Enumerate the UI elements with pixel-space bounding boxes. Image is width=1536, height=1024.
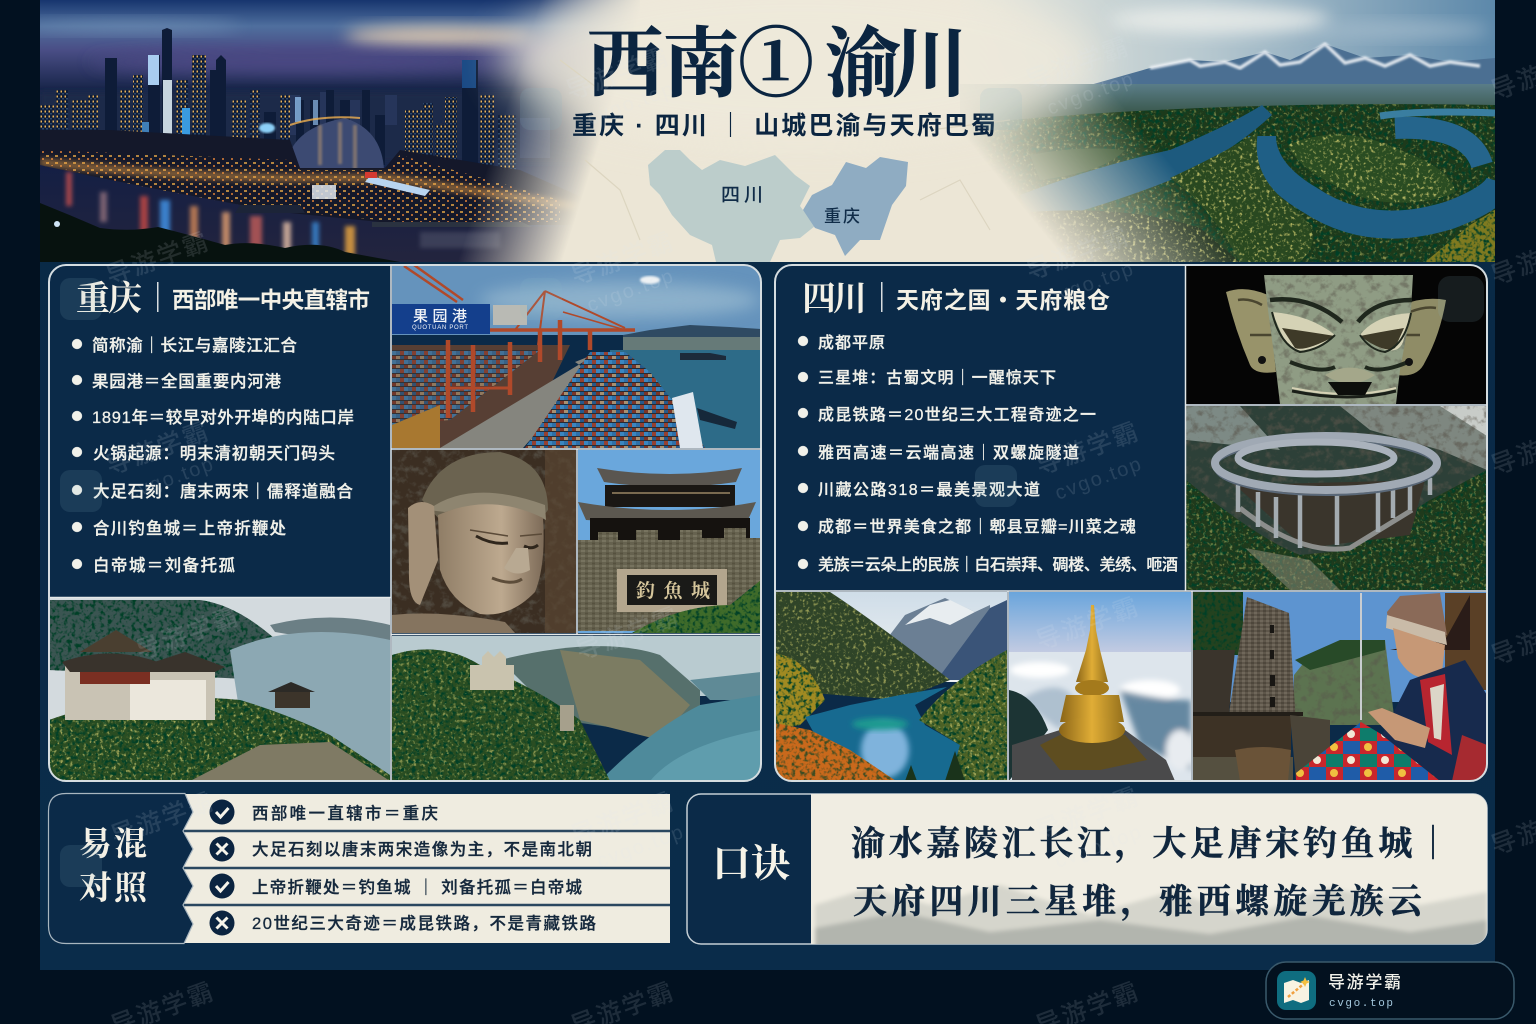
photo: Diaoyu fortress [578,450,761,633]
list: Sichuan facts: 羌族＝云朵上的民族｜白石崇拜、碉楼、羌绣、咂酒 [818,556,1178,574]
photo: Baidi city [49,598,390,781]
photo: Emei golden summit [1009,592,1194,781]
watermarks: 导游学霸 [102,417,214,481]
watermarks: 导游学霸 [1032,417,1144,481]
list: Chongqing facts: 合川钓鱼城＝上帝折鞭处 [93,519,286,538]
brand url: cvgo.top [1329,998,1393,1010]
watermarks: cvgo.top [1052,821,1146,873]
heading: easily confused [79,826,149,907]
header banner [20,0,1500,262]
title: 西南①渝川 [587,23,968,107]
photo: Sanxingdui bronze mask [1186,265,1487,404]
panel: Chongqing [49,265,761,781]
list: Sichuan facts: 雅西高速＝云端高速｜双螺旋隧道 [818,443,1079,462]
photo: Chongqing night skyline [20,0,640,262]
watermarks: 导游学霸 [1022,32,1134,96]
watermarks: cvgo.top [584,78,678,130]
watermarks: cvgo.top [594,821,688,873]
photo: Yaxi spiral highway [1186,406,1487,590]
verse line two: 天府四川三星堆，雅西螺旋羌族云 [853,883,1424,921]
watermarks: 导游学霸 [567,227,679,291]
watermarks: 导游学霸 [572,602,684,666]
watermarks: cvgo.top [1044,68,1138,120]
decorative map contours [560,60,1010,240]
list: Sichuan facts: 川藏公路318＝最美景观大道 [818,480,1040,499]
watermarks: cvgo.top [124,453,218,505]
subtitle: 重庆 · 四川 ｜ 山城巴渝与天府巴蜀 [572,111,996,140]
list: Chongqing facts: 简称渝｜长江与嘉陵江汇合 [92,336,298,355]
photo: Guoyuan port [392,265,761,448]
watermarks: cvgo.top [1044,258,1138,310]
verse line one: 渝水嘉陵汇长江，大足唐宋钓鱼城｜ [851,824,1450,863]
list: Chongqing facts: 白帝城＝刘备托孤 [93,556,236,575]
photo: Diaoyu fortress: 釣魚城 [636,580,710,602]
list: Sichuan facts: 成昆铁路＝20世纪三大工程奇迹之一 [818,406,1096,424]
list: Chongqing facts [72,336,354,575]
row: wrong fact two: 20世纪三大奇迹＝成昆铁路，不是青藏铁路 [252,914,596,933]
list: Chongqing facts: 大足石刻：唐末两宋｜儒释道融合 [93,481,354,501]
list: Sichuan facts: 成都＝世界美食之都｜郫县豆瓣=川菜之魂 [818,517,1136,536]
watermarks: 导游学霸 [102,227,214,291]
row: wrong fact two [210,910,596,936]
list: Sichuan facts: 三星堆：古蜀文明｜一醒惊天下 [818,368,1056,387]
map: Sichuan region [648,150,815,262]
brand name: 导游学霸 [1328,972,1401,992]
heading: mnemonic: 口诀 [712,843,790,886]
watermarks: cvgo.top [1052,453,1146,505]
panel: mnemonic verse [687,794,1487,950]
photo: Dazu rock carving [392,450,576,633]
ink mountains [815,885,1487,950]
brand badge [1266,962,1514,1019]
watermarks: 导游学霸 [1032,782,1144,846]
heading: Sichuan: 四川 [802,281,867,318]
heading: easily confused: 易混 [79,826,147,863]
watermarks: 导游学霸 [562,42,674,106]
list: Chongqing facts: 果园港＝全国重要内河港 [92,371,282,391]
watermarks: 导游学霸 [132,602,244,666]
row: correct fact two: 上帝折鞭处＝钓鱼城 ｜ 刘备托孤＝白帝城 [252,878,582,897]
heading: Sichuan: 天府之国・天府粮仓 [896,287,1110,313]
photo: Qiang tower and embroidery [1191,592,1487,781]
icon: map logo [1277,971,1316,1010]
watermarks: 导游学霸 [107,787,219,851]
row: correct fact two [210,874,582,898]
row: wrong fact one: 大足石刻以唐末两宋造像为主，不是南北朝 [252,839,592,859]
photo: Three Gorges cliff fort [392,636,761,781]
panel: Sichuan [775,265,1487,781]
heading: Chongqing: 西部唯一中央直辖市 [172,287,370,313]
photo: Guoyuan port: 果园港 [413,308,467,325]
photo: Jiuzhaigou lake [775,592,1007,781]
list: Sichuan facts: 成都平原 [818,334,885,352]
heading: easily confused: 对照 [79,870,149,907]
row: correct fact one [210,800,438,824]
watermarks: 导游学霸 [1032,592,1144,656]
watermarks: 导游学霸 [567,787,679,851]
watermarks: cvgo.top [584,265,678,317]
heading: Sichuan [802,281,1110,318]
map label: Chongqing: 重庆 [824,207,860,226]
watermarks: 导游学霸 [1022,222,1134,286]
row: correct fact one: 西部唯一直辖市＝重庆 [252,804,438,823]
list: Sichuan facts [798,334,1178,574]
map: Chongqing region [803,157,908,256]
heading: Chongqing [76,280,370,318]
list: Chongqing facts: 火锅起源：明末清初朝天门码头 [93,444,335,463]
map label: Sichuan: 四川 [721,185,763,206]
row: wrong fact one [210,836,592,862]
heading: Chongqing: 重庆 [76,280,142,318]
photo: Guoyuan port: QUOTUAN PORT [412,325,468,331]
panel: easily confused comparison [48,794,670,944]
list: Chongqing facts: 1891年＝较早对外开埠的内陆口岸 [92,408,354,427]
photo: Sichuan plain aerial [960,0,1500,262]
